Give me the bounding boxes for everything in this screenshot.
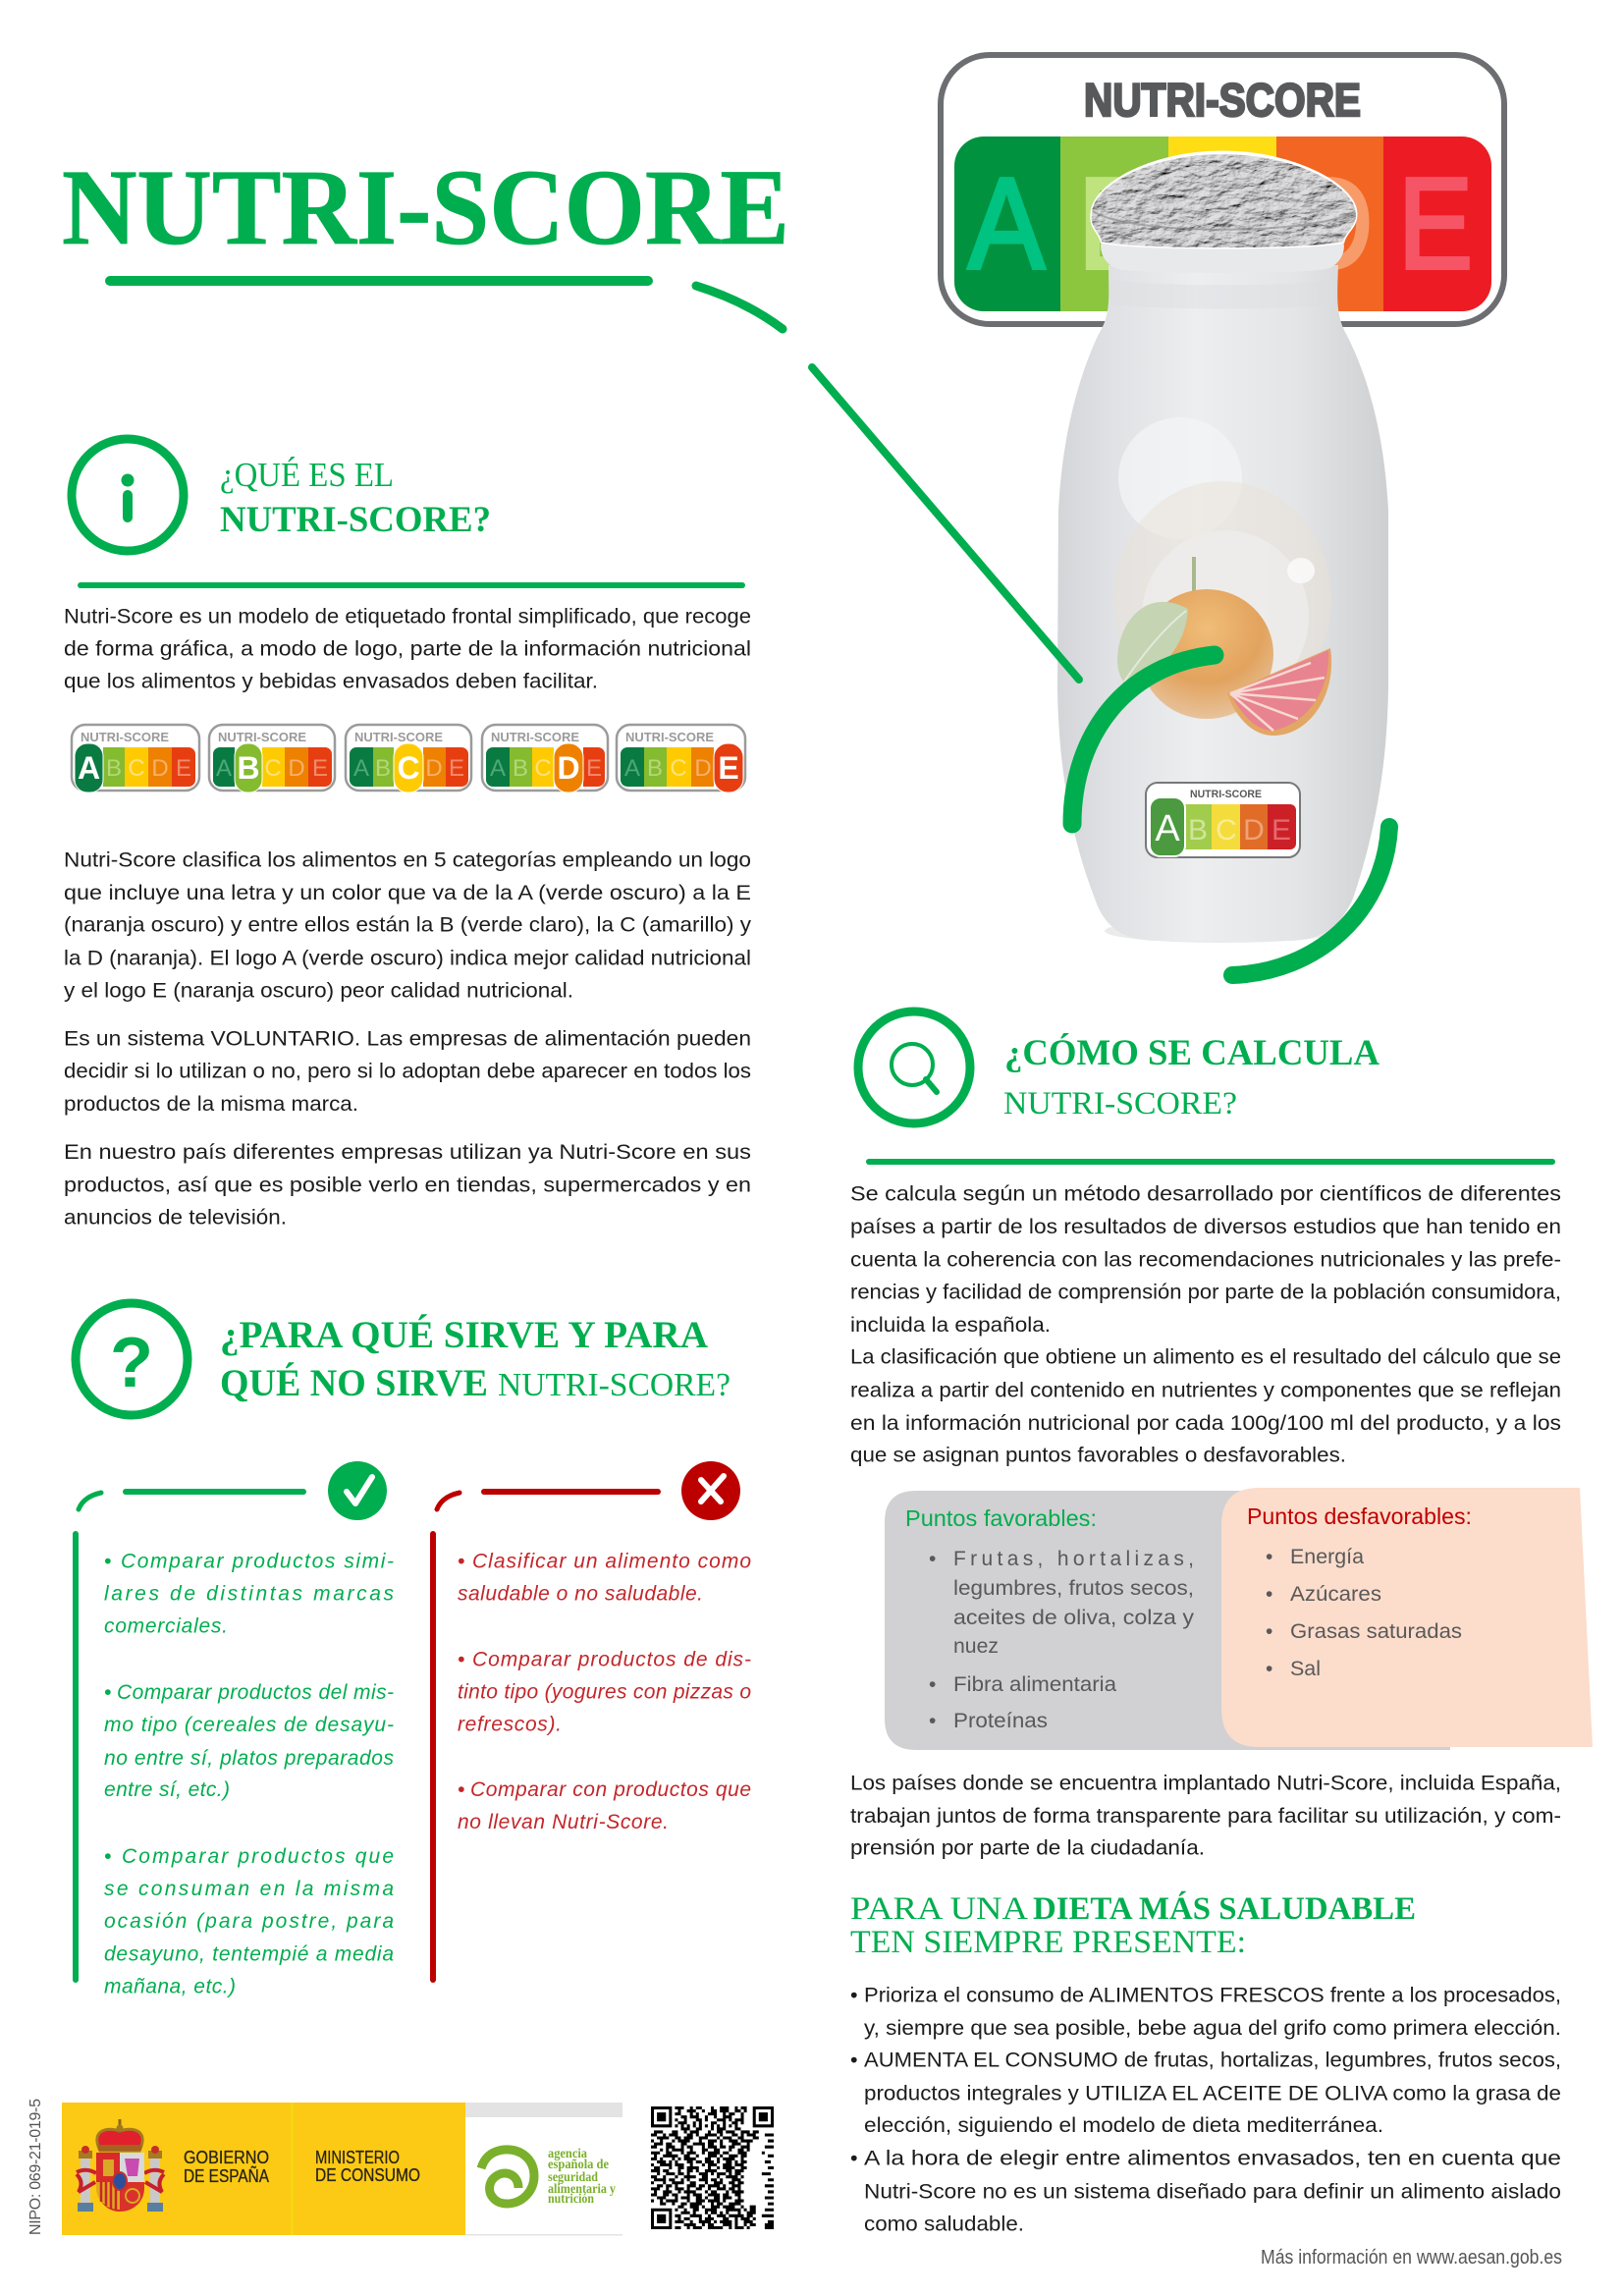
list: useful items: no entre sí, platos preparados [104,1747,395,1770]
heading: que es: ¿QUÉ ES EL [220,456,394,494]
text: categories paragraph [64,848,751,1002]
logo E: C [670,755,687,782]
panel: favourable points [885,1491,1450,1750]
heading: como se calcula [1003,1032,1380,1121]
title underline [110,276,648,286]
large Nutri-Score logo: D [1296,151,1373,296]
list: not useful items: saludable o no saludable. [458,1583,703,1606]
panel: unfavourable points: Azúcares [1290,1583,1381,1606]
QR code [651,2108,774,2228]
text: calculation paragraphs [850,1182,1561,1467]
heading: para que sirve [220,1313,730,1404]
label logo on bottle: C [1216,814,1237,847]
heading: healthier diet [850,1890,1416,1960]
list: useful items: se consuman en la misma [104,1878,394,1900]
text: intro paragraph: que los alimentos y bebidas envasados deben facilitar. [64,670,598,693]
logo A: A [78,750,100,786]
logo E: E [718,750,739,786]
text: country paragraph: En nuestro país diferentes empresas utilizan ya Nutri-Score en sus [64,1140,751,1164]
list: not useful items: Clasificar un alimento como [472,1551,751,1573]
list: not useful items: Comparar con productos que [470,1778,751,1801]
list: advice: elección, siguiendo el modelo de dieta mediterránea. [864,2113,1383,2137]
panel: favourable points: legumbres, frutos secos, [953,1577,1194,1600]
list: not useful items: tinto tipo (yogures con pizzas o [458,1681,751,1703]
logo C: B [375,755,391,782]
large Nutri-Score logo: A [968,151,1045,296]
list: useful items: entre sí, etc.) [104,1778,230,1801]
list: advice: AUMENTA EL CONSUMO de frutas, hortalizas, legumbres, frutos secos, [864,2049,1561,2072]
panel: unfavourable points: • [1266,1620,1272,1643]
logo D: NUTRI-SCORE [491,730,579,744]
text: intro paragraph: de forma gráfica, a modo de logo, parte de la información nutricional [64,637,751,661]
logo A: D [151,755,169,782]
list: useful items: mañana, etc.) [104,1976,236,1997]
logo heading: NUTRI-SCORE [1084,74,1361,126]
text: calculation paragraphs: La clasificación que obtiene un alimento es el resultado del cálculo que se [850,1345,1561,1369]
logo C [346,725,471,793]
text: categories paragraph: que incluye una letra y un color que va de la A (verde oscuro) a la E [64,881,751,904]
heading: para que sirve: NUTRI-SCORE? [498,1367,730,1403]
logo D: A [490,755,506,782]
text: country paragraph: anuncios de televisión. [64,1206,287,1230]
panel: favourable points: Puntos favorables: [905,1505,1097,1531]
text: intro paragraph [64,605,751,693]
list: not useful items: Comparar productos de dis- [472,1648,751,1671]
text: categories paragraph: Nutri-Score clasifica los alimentos en 5 categorías empleando un logo [64,848,751,872]
icon: cross [681,1461,740,1520]
footer: government logos [62,2103,622,2235]
list: useful items: • [104,1845,111,1868]
label logo on bottle: NUTRI-SCORE [1190,789,1262,800]
text: country paragraph: productos, así que es posible verlo en tiendas, supermercados y en [64,1173,751,1196]
text: calculation paragraphs: incluida la española. [850,1313,1051,1337]
list: useful items: lares de distintas marcas [104,1583,395,1606]
logo row: five scores [72,725,745,793]
logo B: C [264,755,282,782]
panel: useful for [76,1461,395,1997]
heading: healthier diet: PARA UNA [850,1891,1028,1927]
text: government [184,2148,269,2186]
text: voluntary paragraph: decidir si lo utilizan o no, pero si lo adoptan debe aparecer en todos los [64,1060,751,1083]
list: useful items: Comparar productos del mis- [117,1681,394,1704]
logo B: E [312,755,328,782]
panel: unfavourable points: • [1266,1546,1272,1568]
logo B: B [237,750,260,786]
logo E: D [694,755,712,782]
short curved connector [696,286,783,329]
large Nutri-Score logo: E [1398,151,1473,296]
list: not useful items: • [458,1551,464,1573]
logo E [617,725,745,793]
icon: agency spiral [481,2150,534,2204]
foil lid [1092,152,1356,247]
list: not useful items: • [458,1648,464,1671]
panel: unfavourable points: Puntos desfavorables: [1247,1503,1472,1529]
panel: unfavourable points: • [1266,1658,1272,1680]
bottle illustration [1057,152,1388,943]
text: categories paragraph: (naranja oscuro) y entre ellos están la B (verde claro), la C (amarillo) y [64,913,751,937]
logo C: A [353,755,369,782]
text: country paragraph [64,1140,751,1230]
logo C: D [425,755,443,782]
icon: question mark [76,1303,188,1415]
text: agency name: alimentaria y [548,2181,616,2196]
text: government: GOBIERNO [184,2148,269,2167]
panel: favourable points: nuez [953,1635,999,1658]
text: countries paragraph: prensión por parte de la ciudadanía. [850,1836,1205,1860]
logo C: NUTRI-SCORE [354,730,443,744]
logo A: E [176,755,191,782]
list: advice: productos integrales y UTILIZA EL ACEITE DE OLIVA como la grasa de [864,2082,1561,2105]
logo A [72,725,199,793]
list: not useful items [458,1551,751,1833]
list: useful items: comerciales. [104,1615,228,1638]
text: calculation paragraphs: realiza a partir del contenido en nutrientes y componentes que se reflejan [850,1379,1561,1402]
panel: unfavourable points: Sal [1290,1658,1321,1680]
text: more information: Más información en www.aesan.gob.es [1261,2247,1562,2269]
list: useful items: Comparar productos simi- [121,1551,394,1573]
panel: favourable points: Proteínas [953,1710,1048,1732]
heading: healthier diet: DIETA MÁS SALUDABLE [1033,1890,1416,1927]
logo D: D [557,750,580,786]
text: government: DE ESPAÑA [184,2165,269,2186]
section: what it is for [76,1303,751,1997]
text: agency name: nutrición [548,2191,594,2206]
list: useful items: desayuno, tentempié a media [104,1943,394,1966]
text: calculation paragraphs: rencias y facilidad de comprensión por parte de la población consumidora, [850,1281,1561,1304]
heading: healthier diet: TEN SIEMPRE PRESENTE: [850,1925,1246,1960]
logo D [482,725,608,793]
text: ministry: DE CONSUMO [315,2165,420,2185]
list: advice: • [850,2147,858,2170]
green arc over bottle [1072,655,1215,824]
heading: para que sirve: ¿PARA QUÉ SIRVE Y PARA [220,1313,708,1356]
panel: favourable points: • [929,1673,936,1696]
text: categories paragraph: la D (naranja). El logo A (verde oscuro) indica mejor calidad nutricional [64,947,751,970]
icon: question mark: ? [110,1324,153,1402]
list: useful items: ocasión (para postre, para [104,1910,394,1933]
text: agency name: agencia [548,2146,587,2160]
text: agency name: seguridad [548,2169,598,2184]
label logo on bottle: D [1243,814,1265,847]
large Nutri-Score logo: B [1078,151,1155,296]
list: not useful items: no llevan Nutri-Score. [458,1811,669,1833]
list: advice [850,1984,1561,2235]
list: advice: y, siempre que sea posible, bebe agua del grifo como primera elección. [864,2016,1561,2040]
panel: unfavourable points: Grasas saturadas [1290,1620,1462,1643]
icon: magnifier [858,1011,970,1123]
label logo on bottle: A [1155,808,1180,849]
list: advice: A la hora de elegir entre alimentos envasados, ten en cuenta que [864,2147,1561,2170]
list: advice: como saludable. [864,2212,1024,2235]
icon: coat of arms [77,2119,164,2212]
text: ministry: MINISTERIO [315,2148,400,2167]
panel: favourable points: Fibra alimentaria [953,1673,1116,1696]
list: useful items: • [104,1681,111,1704]
list: advice: Prioriza el consumo de ALIMENTOS FRESCOS frente a los procesados, [864,1984,1561,2007]
logo C: C [397,750,420,786]
section: what is Nutri-Score [64,439,751,1230]
green arc under bottle [1232,827,1389,975]
logo D: B [513,755,528,782]
diagonal connector line [812,367,1079,680]
list: advice: • [850,1984,858,2007]
text: voluntary paragraph [64,1026,751,1116]
text: calculation paragraphs: cuenta la coherencia con las recomendaciones nutricionales y las prefe- [850,1247,1561,1271]
logo A: C [128,755,145,782]
text: countries paragraph: Los países donde se encuentra implantado Nutri-Score, incluida España, [850,1772,1561,1795]
text: voluntary paragraph: Es un sistema VOLUNTARIO. Las empresas de alimentación pueden [64,1026,751,1050]
logo D: E [586,755,602,782]
label logo on bottle: E [1271,814,1291,847]
panel: favourable points: • [929,1710,936,1732]
text: calculation paragraphs: que se asignan puntos favorables o desfavorables. [850,1444,1346,1467]
list: useful items: • [104,1551,111,1573]
heading: para que sirve: QUÉ NO SIRVE [220,1361,488,1404]
title: NUTRI-SCORE [62,147,789,267]
panel: not useful for [433,1461,751,1980]
logo B: A [216,755,232,782]
text: voluntary paragraph: productos de la misma marca. [64,1092,358,1116]
logo A: B [106,755,122,782]
panel: unfavourable points: • [1266,1583,1272,1606]
text: calculation paragraphs: países a partir de los resultados de diversos estudios que han tenido en [850,1215,1561,1238]
list: useful items: Comparar productos que [122,1845,394,1868]
text: categories paragraph: y el logo E (naranja oscuro) peor calidad nutricional. [64,978,573,1002]
list: advice: • [850,2049,858,2072]
label logo on bottle: B [1188,814,1208,847]
panel: favourable points: • [929,1548,936,1570]
text: calculation paragraphs: en la información nutricional por cada 100g/100 ml del producto, y a los [850,1411,1561,1435]
panel: unfavourable points: Energía [1290,1546,1364,1568]
text: countries paragraph [850,1772,1561,1860]
large Nutri-Score logo [941,55,1504,324]
list: advice: Nutri-Score no es un sistema diseñado para definir un alimento aislado [864,2180,1561,2204]
icon: info [72,439,184,551]
text: agency name [548,2146,616,2206]
text: intro paragraph: Nutri-Score es un modelo de etiquetado frontal simplificado, que recoge [64,605,751,629]
text: countries paragraph: trabajan juntos de forma transparente para facilitar su utilización, y com- [850,1804,1561,1828]
logo D: C [534,755,552,782]
logo B: D [288,755,305,782]
list: useful items: mo tipo (cereales de desayu- [104,1714,394,1736]
heading: como se calcula: NUTRI-SCORE? [1003,1086,1237,1121]
label logo on bottle [1146,783,1300,857]
text: agency name: española de [548,2157,609,2171]
logo E: B [647,755,663,782]
icon: check [328,1461,387,1520]
text: calculation paragraphs: Se calcula según un método desarrollado por científicos de diferentes [850,1182,1561,1206]
list: useful items [104,1551,395,1997]
logo C: E [449,755,464,782]
logo B [209,725,335,793]
text: ministry [315,2148,420,2185]
logo A: NUTRI-SCORE [81,730,169,744]
heading: que es [220,456,491,540]
heading: como se calcula: ¿CÓMO SE CALCULA [1004,1032,1380,1073]
text: NIPO code: NIPO: 069-21-019-5 [27,2099,44,2235]
heading: que es: NUTRI-SCORE? [220,500,491,540]
list: not useful items: refrescos). [458,1713,562,1735]
logo E: NUTRI-SCORE [625,730,714,744]
logo E: A [624,755,640,782]
panel: favourable points: aceites de oliva, colza y [953,1607,1195,1629]
panel: favourable points: Frutas, hortalizas, [953,1548,1194,1570]
list: not useful items: • [458,1778,464,1801]
panel: unfavourable points [1221,1488,1593,1747]
logo B: NUTRI-SCORE [218,730,306,744]
section: how it is calculated [850,1011,1593,2269]
